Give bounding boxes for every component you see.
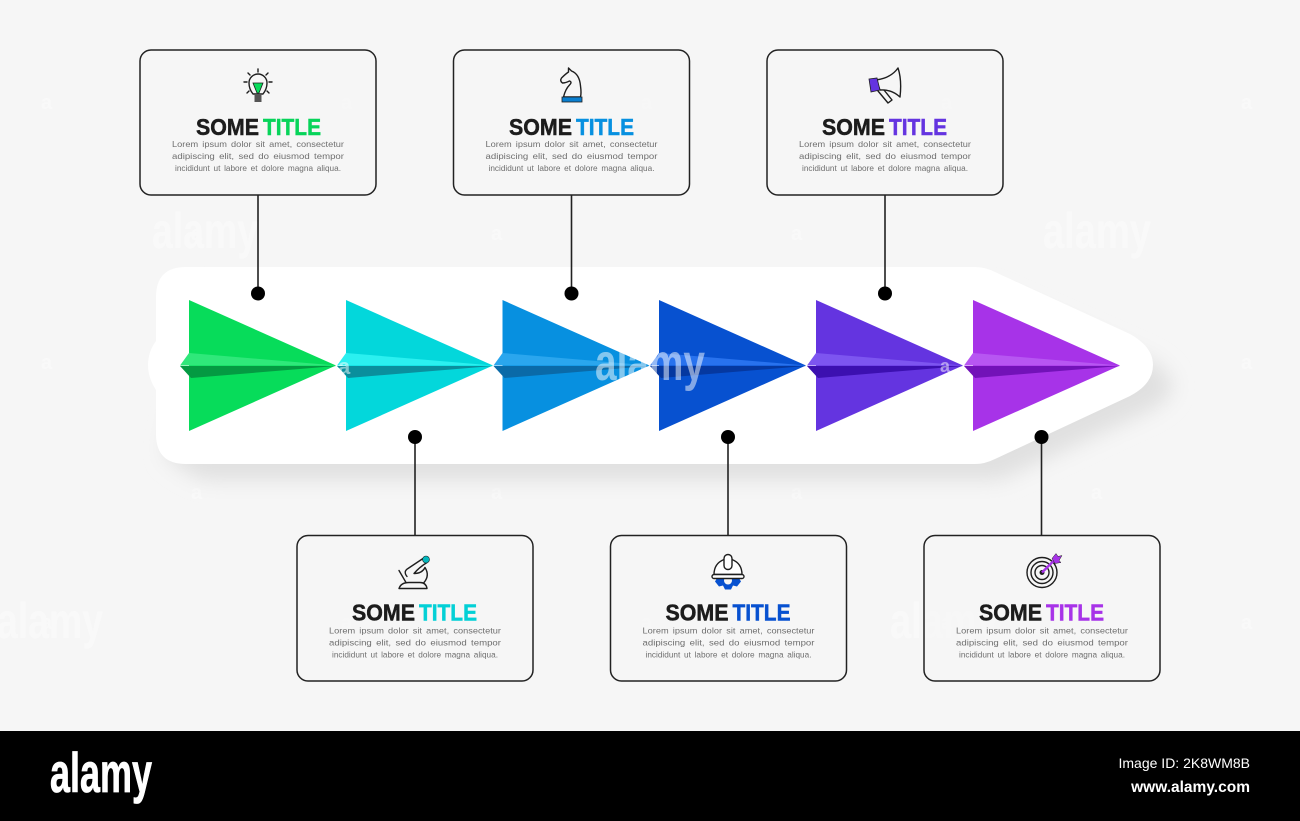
heading — [822, 114, 947, 140]
heading: TITLE — [732, 600, 790, 626]
heading: TITLE — [263, 114, 321, 140]
body text: incididunt ut labore et dolore magna aliqua. — [175, 163, 341, 173]
body text: incididunt ut labore et dolore magna aliqua. — [332, 650, 498, 660]
watermark: small and large alamy marks on the background: a — [941, 92, 953, 114]
watermark: small and large alamy marks on the background: a — [1241, 612, 1253, 634]
body text: adipiscing elit, sed do eiusmod tempor — [172, 151, 344, 161]
body text: adipiscing elit, sed do eiusmod tempor — [329, 638, 501, 648]
heading: SOME — [196, 114, 259, 140]
body text — [956, 626, 1128, 660]
watermark: small and large alamy marks on the background: alamy — [0, 593, 103, 649]
icon: helmet and gear — [712, 554, 744, 590]
panel: step 3 card — [767, 50, 1003, 195]
heading: TITLE — [1046, 600, 1104, 626]
watermark: small and large alamy marks on the background: a — [1091, 482, 1103, 504]
body text: Lorem ipsum dolor sit amet, consectetur — [172, 139, 344, 149]
watermark: small and large alamy marks on the background: a — [791, 482, 803, 504]
body text: incididunt ut labore et dolore magna aliqua. — [959, 650, 1125, 660]
watermark: small and large alamy marks on the background: alamy — [890, 593, 998, 649]
connector 6 — [1034, 430, 1048, 535]
watermark: small and large alamy marks on the background: a — [941, 612, 953, 634]
plane 2: cyan — [337, 300, 493, 431]
watermark: alamy over the planes — [338, 334, 951, 392]
panel: step 2 card — [454, 50, 690, 195]
image id: Image ID: 2K8WM8B — [1118, 755, 1250, 771]
watermark: small and large alamy marks on the background: a — [1241, 92, 1253, 114]
heading: TITLE — [576, 114, 634, 140]
icon: microscope — [399, 556, 430, 588]
body text: adipiscing elit, sed do eiusmod tempor — [799, 151, 971, 161]
watermark: small and large alamy marks on the background: a — [491, 482, 503, 504]
body text — [642, 626, 815, 660]
heading — [666, 600, 790, 626]
body text: Lorem ipsum dolor sit amet, consectetur — [329, 626, 501, 636]
panel: white arrow background — [148, 267, 1153, 464]
watermark: small and large alamy marks on the background: a — [641, 92, 653, 114]
watermark: alamy over the planes: a — [338, 354, 351, 379]
icon: light bulb — [244, 69, 272, 102]
heading: TITLE — [889, 114, 947, 140]
footer logo: alamy — [50, 741, 152, 804]
watermark: small and large alamy marks on the background: a — [41, 612, 53, 634]
watermark: alamy over the planes: alamy — [595, 334, 705, 392]
heading: SOME — [352, 600, 415, 626]
body text: adipiscing elit, sed do eiusmod tempor — [956, 638, 1128, 648]
watermark: small and large alamy marks on the background: a — [641, 612, 653, 634]
body text: incididunt ut labore et dolore magna aliqua. — [802, 163, 968, 173]
watermark: alamy over the planes: a — [940, 356, 951, 376]
plane 1: green — [180, 300, 336, 431]
watermark: small and large alamy marks on the background: a — [191, 482, 203, 504]
body text: Lorem ipsum dolor sit amet, consectetur — [486, 139, 658, 149]
plane 6: purple — [964, 300, 1120, 431]
body text: incididunt ut labore et dolore magna aliqua. — [646, 650, 812, 660]
panel: step 1 card — [140, 50, 376, 195]
watermark: small and large alamy marks on the background: a — [1241, 352, 1253, 374]
watermark: small and large alamy marks on the background — [0, 92, 1253, 649]
watermark: small and large alamy marks on the background: alamy — [152, 203, 258, 259]
body text: adipiscing elit, sed do eiusmod tempor — [642, 638, 815, 648]
body text — [329, 626, 501, 660]
watermark: small and large alamy marks on the background: a — [491, 223, 503, 245]
body text — [172, 139, 344, 173]
body text: Lorem ipsum dolor sit amet, consectetur — [799, 139, 971, 149]
body text — [486, 139, 658, 173]
heading — [509, 114, 634, 140]
connector 1 — [251, 195, 265, 300]
body text: Lorem ipsum dolor sit amet, consectetur — [642, 626, 815, 636]
watermark: small and large alamy marks on the background: a — [341, 92, 353, 114]
panel: step 5 card — [610, 536, 846, 681]
watermark: small and large alamy marks on the background: a — [191, 223, 203, 245]
heading — [352, 600, 477, 626]
plane 4: royal blue — [650, 300, 806, 431]
icon: chess knight — [561, 68, 582, 102]
arrow shadow — [165, 290, 1172, 480]
plane 5: violet — [807, 300, 963, 431]
body text: incididunt ut labore et dolore magna aliqua. — [488, 163, 654, 173]
watermark: small and large alamy marks on the background: a — [41, 92, 53, 114]
body text — [799, 139, 971, 173]
heading: SOME — [979, 600, 1042, 626]
heading — [979, 600, 1104, 626]
connector 2 — [564, 195, 578, 300]
plane 3: blue — [494, 300, 650, 431]
website: www.alamy.com — [1130, 779, 1250, 796]
heading: SOME — [509, 114, 572, 140]
panel: step 4 card — [297, 536, 533, 681]
watermark: small and large alamy marks on the background: a — [791, 223, 803, 245]
footer bar — [0, 731, 1300, 821]
heading: SOME — [822, 114, 885, 140]
heading — [196, 114, 321, 140]
connector 3 — [878, 195, 892, 300]
icon: target with dart — [1027, 554, 1062, 588]
icon: megaphone — [869, 68, 901, 103]
connector 4 — [408, 430, 422, 535]
watermark: small and large alamy marks on the background: a — [341, 612, 353, 634]
watermark: small and large alamy marks on the background: alamy — [1043, 203, 1151, 259]
body text: adipiscing elit, sed do eiusmod tempor — [486, 151, 658, 161]
connector 5 — [721, 430, 735, 535]
heading: TITLE — [419, 600, 477, 626]
watermark: small and large alamy marks on the background: a — [41, 352, 53, 374]
panel: step 6 card — [924, 536, 1160, 681]
heading: SOME — [666, 600, 728, 626]
body text: Lorem ipsum dolor sit amet, consectetur — [956, 626, 1128, 636]
